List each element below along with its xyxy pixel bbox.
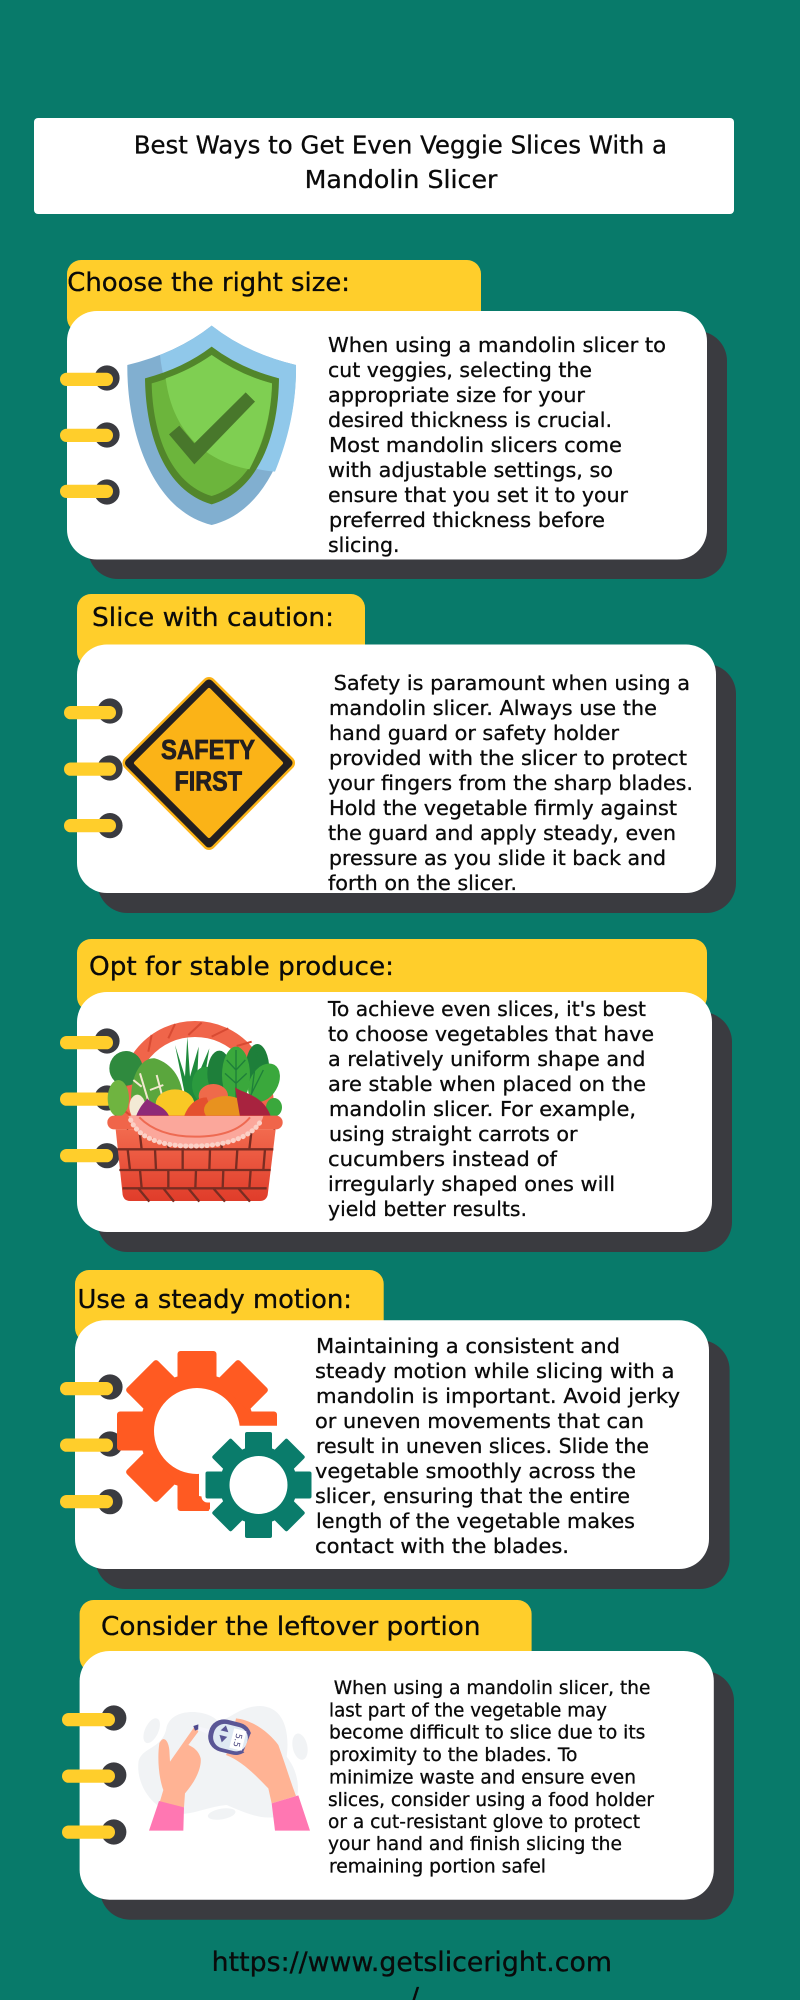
text block: consider the leftover portion: When using a mandolin slicer, the — [334, 1678, 650, 1699]
panel: consider the leftover portion — [62, 1600, 734, 1920]
text block: choose the right size: with adjustable settings, so — [328, 458, 613, 482]
text block: use a steady motion: length of the vegetable makes — [316, 1509, 635, 1533]
text block: slice with caution: mandolin slicer. Always use the — [329, 696, 657, 720]
text block: use a steady motion: or uneven movements that can — [315, 1409, 644, 1433]
panel: opt for stable produce — [60, 939, 732, 1252]
notebook rings — [62, 1705, 126, 1845]
icon: safety first sign — [130, 684, 288, 843]
card shadow — [95, 1340, 730, 1589]
text block: use a steady motion: steady motion while slicing with a — [315, 1359, 674, 1383]
card — [75, 1320, 709, 1569]
card — [80, 1651, 714, 1900]
card — [67, 311, 707, 560]
icon: orange and teal gears — [117, 1351, 312, 1538]
text block: slice with caution: hand guard or safety holder — [329, 721, 620, 745]
text block: slice with caution: provided with the slicer to protect — [329, 746, 687, 770]
heading tab: use a steady motion: Use a steady motion: — [78, 1285, 352, 1315]
text block: slice with caution: Safety is paramount when using a — [334, 671, 690, 695]
text block: opt for stable produce: cucumbers instead of — [328, 1147, 558, 1171]
panel: slice with caution — [64, 594, 736, 913]
text block: consider the leftover portion: last part of the vegetable may — [329, 1700, 607, 1721]
heading tab: consider the leftover portion: Consider the leftover portion — [101, 1612, 481, 1642]
heading tab: slice with caution — [77, 594, 365, 666]
footer url — [212, 1947, 612, 2000]
footer url: https://www.getsliceright.com — [212, 1947, 612, 1978]
title: Best Ways to Get Even Veggie Slices With a — [134, 130, 667, 159]
notebook rings — [60, 365, 120, 505]
text block: consider the leftover portion — [328, 1678, 654, 1877]
text block: use a steady motion: contact with the blades. — [315, 1534, 569, 1558]
panel: choose the right size — [60, 260, 727, 579]
text block: opt for stable produce — [327, 997, 654, 1221]
text block: use a steady motion: vegetable smoothly across the — [315, 1459, 636, 1483]
heading tab: choose the right size: Choose the right size: — [67, 268, 350, 298]
icon: vegetable basket — [107, 1023, 286, 1202]
text block: opt for stable produce: irregularly shaped ones will — [328, 1172, 615, 1196]
title: Mandolin Slicer — [305, 165, 498, 194]
text block: opt for stable produce: are stable when placed on the — [328, 1072, 646, 1096]
text block: consider the leftover portion: your hand and finish slicing the — [328, 1834, 622, 1855]
card shadow — [100, 1671, 734, 1920]
heading tab: consider the leftover portion — [80, 1600, 532, 1672]
text block: use a steady motion: result in uneven slices. Slide the — [316, 1434, 649, 1458]
text block: use a steady motion: slicer, ensuring that the entire — [315, 1484, 630, 1508]
panel: use a steady motion — [60, 1270, 730, 1589]
text block: opt for stable produce: To achieve even slices, it's best — [327, 997, 646, 1021]
heading tab: use a steady motion — [75, 1270, 384, 1342]
card shadow — [98, 664, 736, 913]
notebook rings — [64, 698, 123, 838]
text block: choose the right size: appropriate size for your — [328, 383, 586, 407]
text block: consider the leftover portion: remaining portion safel — [329, 1856, 546, 1877]
text block: opt for stable produce: using straight carrots or — [329, 1122, 578, 1146]
text block: consider the leftover portion: slices, consider using a food holder — [328, 1790, 654, 1811]
text block: choose the right size: Most mandolin slicers come — [329, 433, 622, 457]
text block: choose the right size: When using a mandolin slicer to — [328, 333, 666, 357]
icon: hands holding a meter: 5.5 — [230, 1732, 243, 1748]
text block: consider the leftover portion: become difficult to slice due to its — [329, 1723, 645, 1744]
text block: slice with caution: your fingers from the sharp blades. — [328, 771, 693, 795]
icon: safety first sign: SAFETY — [161, 734, 255, 765]
notebook rings — [60, 1028, 120, 1168]
icon: shield with check mark — [127, 326, 296, 525]
text block: choose the right size — [328, 333, 666, 557]
text block: choose the right size: cut veggies, selecting the — [328, 358, 592, 382]
text block: consider the leftover portion: or a cut-resistant glove to protect — [328, 1812, 640, 1833]
text block: slice with caution: forth on the slicer. — [328, 871, 517, 895]
text block: opt for stable produce: yield better results. — [328, 1197, 527, 1221]
heading tab: choose the right size — [67, 260, 481, 332]
notebook rings — [60, 1374, 123, 1514]
text block: use a steady motion: Maintaining a consistent and — [316, 1334, 620, 1358]
icon: safety first sign: FIRST — [174, 766, 242, 797]
text block: opt for stable produce: to choose vegetables that have — [328, 1022, 654, 1046]
text block: choose the right size: ensure that you set it to your — [328, 483, 629, 507]
text block: choose the right size: slicing. — [328, 533, 400, 557]
card — [77, 992, 712, 1232]
text block: slice with caution: the guard and apply steady, even — [328, 821, 676, 845]
text block: opt for stable produce: a relatively uniform shape and — [328, 1047, 645, 1071]
heading tab: slice with caution: Slice with caution: — [92, 603, 334, 633]
icon: hands holding a meter — [138, 1706, 310, 1831]
text block: slice with caution: Hold the vegetable firmly against — [329, 796, 677, 820]
text block: slice with caution: pressure as you slide it back and — [329, 846, 666, 870]
text block: choose the right size: preferred thickness before — [329, 508, 605, 532]
text block: opt for stable produce: mandolin slicer. For example, — [329, 1097, 636, 1121]
card shadow — [88, 331, 727, 579]
heading tab: opt for stable produce: Opt for stable produce: — [89, 952, 394, 982]
card — [77, 644, 716, 893]
text block: choose the right size: desired thickness is crucial. — [328, 408, 612, 432]
title — [34, 118, 734, 214]
text block: consider the leftover portion: proximity to the blades. To — [329, 1745, 578, 1766]
text block: slice with caution — [328, 671, 693, 895]
text block: consider the leftover portion: minimize waste and ensure even — [329, 1767, 636, 1788]
text block: use a steady motion — [315, 1334, 680, 1558]
heading tab: opt for stable produce — [77, 939, 707, 1011]
text block: use a steady motion: mandolin is important. Avoid jerky — [316, 1384, 680, 1408]
card shadow — [98, 1012, 732, 1252]
